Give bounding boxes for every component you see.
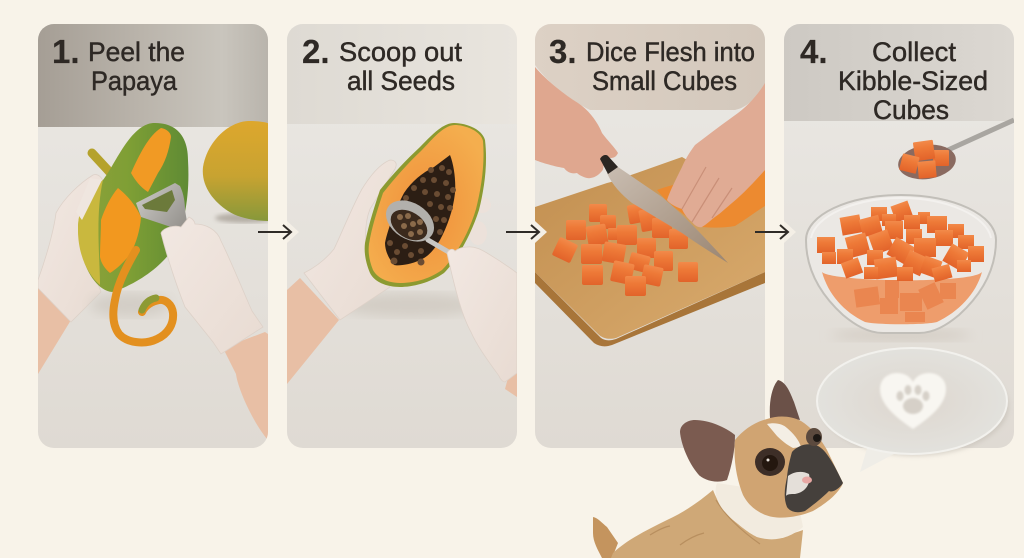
right glove [447,247,517,382]
step titles [52,33,988,125]
sweater [611,490,803,558]
arrow: step 3 to 4 [755,221,796,243]
right hand [667,83,765,227]
right eye [806,428,822,446]
step 4 header backdrop [784,24,1014,121]
shadow below papaya [352,292,462,318]
arrow: step 1 to 2 [258,221,299,243]
icon: glass bowl with cubes [806,195,996,341]
right wrist [505,373,517,397]
left ear [680,420,735,482]
blaze [767,423,801,448]
right ear [770,380,800,420]
lower cubes through glass [854,280,956,322]
right arm [223,332,268,440]
step 2 title: 2. [302,33,330,70]
step 1 header backdrop [38,24,268,127]
left glove [304,160,396,320]
icon: knife [600,155,728,263]
step 3 title [549,33,755,96]
step 2 header backdrop [287,24,517,124]
papaya peel curl [113,250,173,342]
head [734,417,843,518]
right glove [161,217,263,354]
arrow: step 2 to 3 [506,221,547,243]
step 4 title: Cubes [873,95,949,125]
step 2 title: all Seeds [347,66,455,96]
step 1 title: Papaya [91,66,177,96]
icon: spoon with cubes [896,120,1014,183]
icon: whole papaya in background [203,121,275,223]
step 1 title: Peel the [88,37,185,67]
step 4 title: 4. [800,33,828,70]
left thumb [79,180,102,220]
step 3 title: Small Cubes [592,66,737,96]
panel: step 2 scoop out seeds [287,24,517,448]
icon: spoon with seeds [386,200,450,254]
panel: step 3 dice flesh [530,24,765,448]
diced cubes [552,203,698,296]
left hand [530,67,618,178]
icon: heart [880,373,946,429]
panel: step 4 collect cubes [784,24,1014,448]
white muzzle and tongue [786,472,812,496]
upper cubes [817,200,984,282]
left arm [287,278,339,384]
step 2 title [302,33,463,96]
step 3 title: Dice Flesh into [586,37,755,67]
step 4 title: Kibble-Sized [838,66,988,96]
step 1 title: 1. [52,33,80,70]
cutting board [535,157,765,346]
icon: peeler [136,183,186,226]
speech bubble with heart and paw [817,348,1009,472]
step 3 header backdrop [535,24,765,110]
tail [593,517,618,558]
panel: step 1 peel the papaya [38,24,275,448]
left arm and glove [38,175,103,374]
step 1 title [52,33,185,96]
icon: paw [896,385,930,414]
step 4 title: Collect [872,37,957,67]
icon: halved papaya with seeds [365,123,486,287]
step 3 title: 3. [549,33,577,70]
icon: papaya being peeled [78,123,188,342]
dark muzzle [785,444,843,512]
left eye [755,448,785,476]
step 2 title: Scoop out [339,37,463,67]
step 4 title [800,33,988,125]
collar [716,483,803,539]
illustration: french bulldog in knit sweater [593,380,843,558]
papaya chunk [657,170,765,228]
back fingers [469,197,491,245]
